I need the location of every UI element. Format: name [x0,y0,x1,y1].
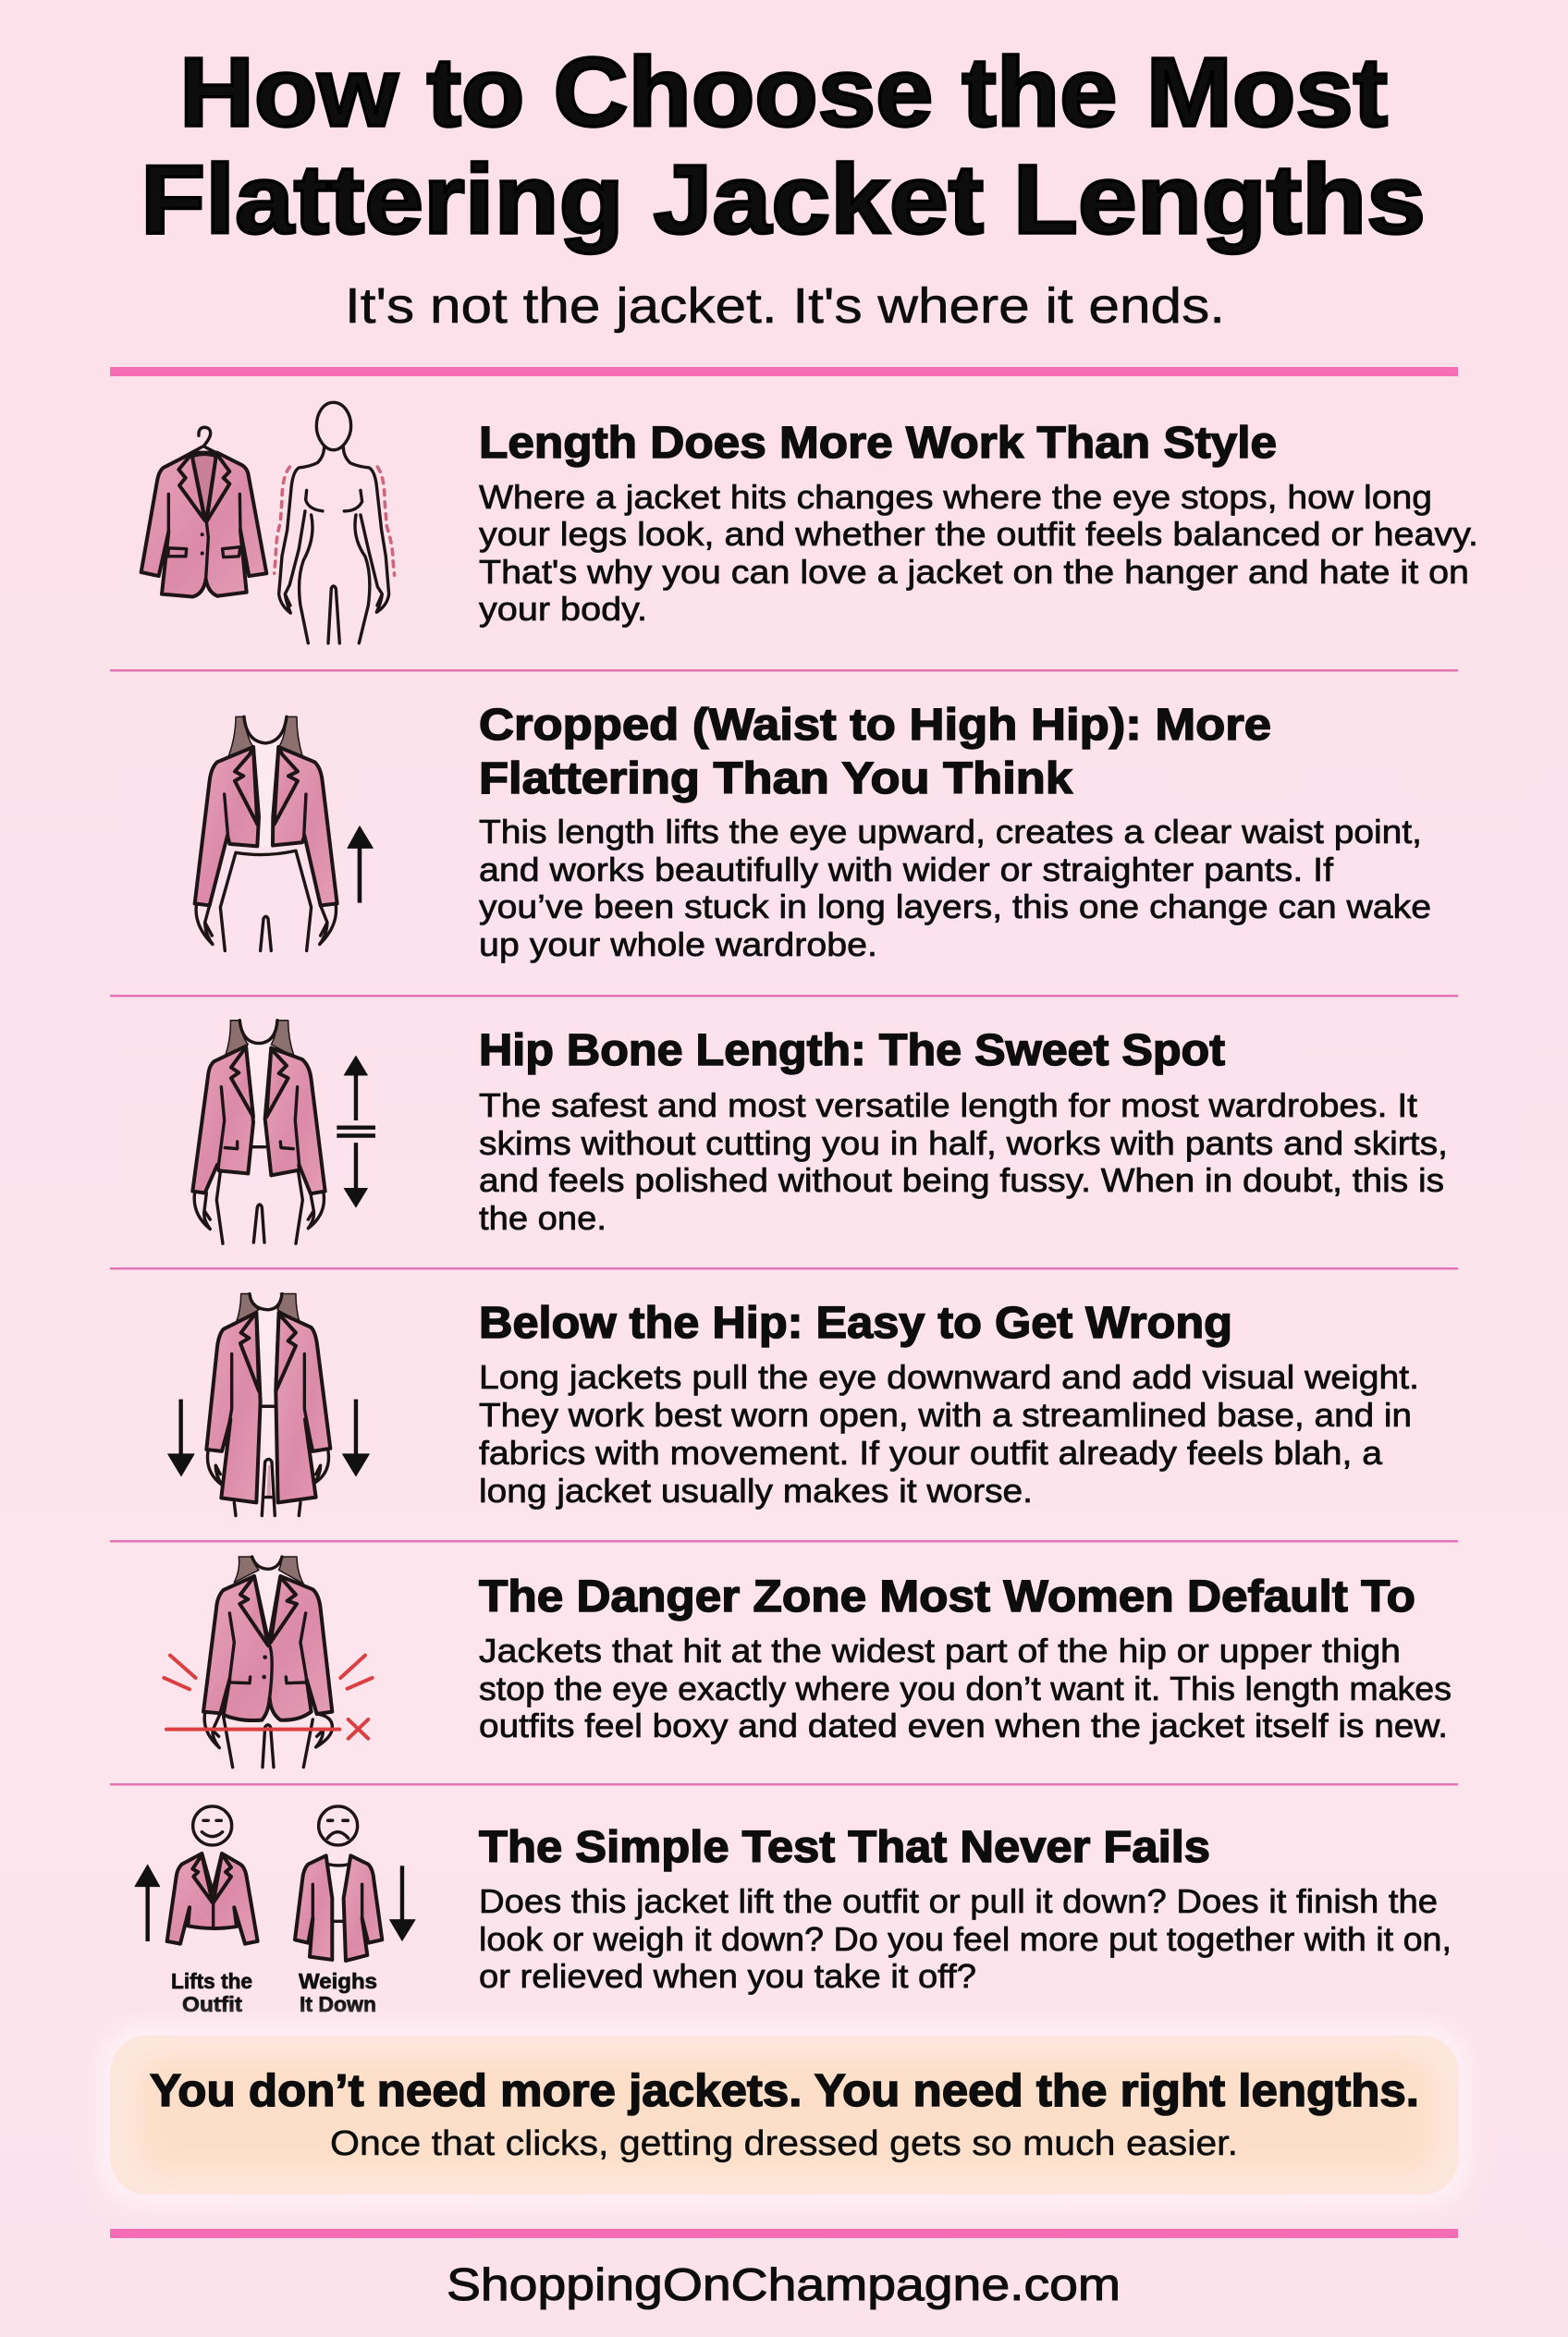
label: weighs it down: Weighs [299,1969,377,1993]
heading: Below the Hip: Easy to Get Wrong [479,1299,1232,1348]
body text [479,1632,1452,1744]
callout [110,2036,1459,2195]
icon: happy and sad faces with jackets [135,1806,415,1961]
callout: You don’t need more jackets. You need the right lengths. [150,2066,1419,2116]
title [141,38,1426,254]
bottom pink bar [110,2229,1458,2238]
heading: Length Does More Work Than Style [479,419,1277,468]
icon: long jacket figure with down arrows [168,1294,369,1516]
body text [479,1358,1419,1510]
panel: length does more work than style [141,402,1478,643]
label: weighs it down: It Down [300,1992,376,2016]
body text: long jacket usually makes it worse. [479,1472,1033,1510]
heading: The Simple Test That Never Fails [479,1823,1210,1872]
body text: outfits feel boxy and dated even when the jacket itself is new. [479,1707,1448,1744]
body text: Long jackets pull the eye downward and add visual weight. [479,1358,1419,1396]
body text [479,813,1431,963]
body text: you’ve been stuck in long layers, this one change can wake [479,887,1431,925]
body text: your body. [479,590,647,628]
icon: hip length jacket figure with balanced arrows [192,1021,375,1243]
label: lifts the outfit: Outfit [182,1992,242,2016]
label: lifts the outfit: Lifts the [171,1969,252,1993]
body text: That's why you can love a jacket on the hanger and hate it on [479,553,1469,591]
panel: cropped jacket [195,701,1431,963]
panel: hip bone length [192,1021,1448,1243]
icon: jacket at widest hip with red warning marks [164,1557,373,1768]
body text: or relieved when you take it off? [479,1957,976,1995]
body text: look or weigh it down? Do you feel more put together with it on, [479,1920,1452,1958]
body text: stop the eye exactly where you don’t want it. This length makes [479,1670,1452,1707]
body text [479,1882,1452,1995]
panel: the simple test [135,1806,1452,2016]
heading: Flattering Than You Think [479,754,1072,803]
panel: the danger zone [164,1557,1452,1768]
body text: up your whole wardrobe. [479,925,877,963]
body text: skims without cutting you in half, works with pants and skirts, [479,1124,1448,1162]
subtitle: It's not the jacket. It's where it ends. [345,278,1225,334]
icon: jacket on hanger and body outline [141,402,395,643]
body text: fabrics with movement. If your outfit already feels blah, a [479,1434,1383,1472]
icon: cropped jacket figure with up arrow [195,716,373,950]
heading: Hip Bone Length: The Sweet Spot [479,1026,1225,1075]
body text: and feels polished without being fussy. When in doubt, this is [479,1161,1444,1199]
label: lifts the outfit [171,1969,252,2016]
panel: below the hip [168,1294,1419,1516]
body text: The safest and most versatile length for most wardrobes. It [479,1086,1417,1124]
heading: Cropped (Waist to High Hip): More [479,701,1271,750]
heading: The Danger Zone Most Women Default To [479,1572,1415,1621]
callout: Once that clicks, getting dressed gets so much easier. [330,2124,1238,2163]
body text: They work best worn open, with a streamlined base, and in [479,1396,1412,1434]
label: weighs it down [299,1969,377,2016]
body text: Where a jacket hits changes where the eye stops, how long [479,478,1432,516]
body text [479,478,1478,628]
body text: This length lifts the eye upward, creates a clear waist point, [479,813,1422,850]
body text: and works beautifully with wider or straighter pants. If [479,850,1334,888]
footer website: ShoppingOnChampagne.com [447,2260,1121,2310]
body text [479,1086,1448,1237]
heading [479,701,1271,803]
title: Flattering Jacket Lengths [141,145,1426,254]
body text: Does this jacket lift the outfit or pull it down? Does it finish the [479,1882,1438,1920]
body text: the one. [479,1199,606,1237]
title: How to Choose the Most [179,38,1388,147]
top pink bar [110,367,1458,376]
body text: your legs look, and whether the outfit feels balanced or heavy. [479,515,1478,553]
body text: Jackets that hit at the widest part of the hip or upper thigh [479,1632,1401,1670]
